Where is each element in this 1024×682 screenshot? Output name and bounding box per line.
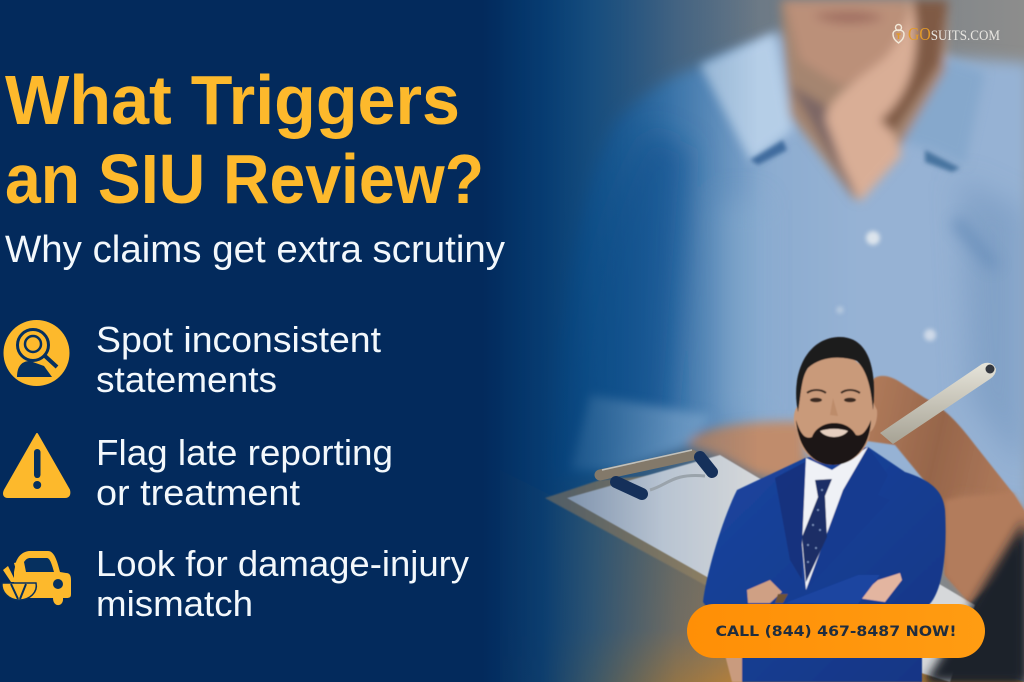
shirt collars (700, 33, 792, 162)
neck tie (802, 479, 832, 582)
eyes and brows (807, 390, 860, 416)
background photo: man at desk (500, 0, 1024, 682)
list item: damage-injury mismatch: Look for damage-injury (96, 543, 469, 584)
shirt cuff (570, 395, 712, 470)
call-to-action button: CALL (844) 467-8487 NOW! (716, 624, 956, 640)
icon: logo shield (893, 24, 904, 43)
suit (703, 447, 946, 682)
list item: inconsistent statements (4, 319, 381, 400)
mouth (820, 429, 848, 437)
attorney portrait (703, 337, 946, 682)
desk (500, 470, 1024, 682)
shirt body (548, 33, 1024, 520)
list item: inconsistent statements: Spot inconsistent (96, 319, 381, 360)
list item: late reporting: Flag late reporting (96, 432, 393, 473)
beard (796, 420, 871, 465)
shirt buttons (866, 231, 880, 245)
shirt and collar (802, 447, 868, 590)
icon: magnifier over person (4, 320, 70, 386)
call-to-action button (687, 604, 985, 658)
hand on cheek (826, 0, 948, 202)
icon: warning triangle (4, 434, 69, 497)
list item: late reporting (4, 432, 393, 513)
title: an SIU Review? (5, 140, 484, 218)
collar shadows (750, 140, 787, 165)
list item: damage-injury mismatch (2, 543, 469, 624)
hair (796, 337, 874, 412)
neck and chin (780, 0, 945, 200)
list item: damage-injury mismatch: mismatch (96, 583, 253, 624)
dark foreground shoulder (925, 520, 1024, 682)
list item: inconsistent statements: statements (96, 359, 277, 400)
hand over paper and pen (880, 363, 1024, 682)
sleeve fold (950, 215, 1000, 270)
clip bar (600, 455, 692, 475)
subtitle: Why claims get extra scrutiny (5, 229, 505, 271)
forearm at table (685, 422, 805, 485)
writing hand with pen (860, 376, 1024, 603)
clipboard frame (545, 470, 730, 592)
crossed arms and hands (747, 573, 902, 604)
hand below button (725, 655, 745, 682)
mouth (813, 11, 884, 24)
clipboard paper (567, 455, 975, 682)
title: What Triggers (5, 61, 460, 139)
title (5, 61, 484, 218)
icon: damaged car (2, 551, 71, 605)
clipboard (545, 450, 975, 682)
clip handles (616, 482, 642, 494)
head (794, 355, 877, 465)
lapel shadows (775, 462, 805, 580)
list item: late reporting: or treatment (96, 472, 300, 513)
logo: GoSuits.com: GOSUITS.COM (908, 24, 1000, 44)
